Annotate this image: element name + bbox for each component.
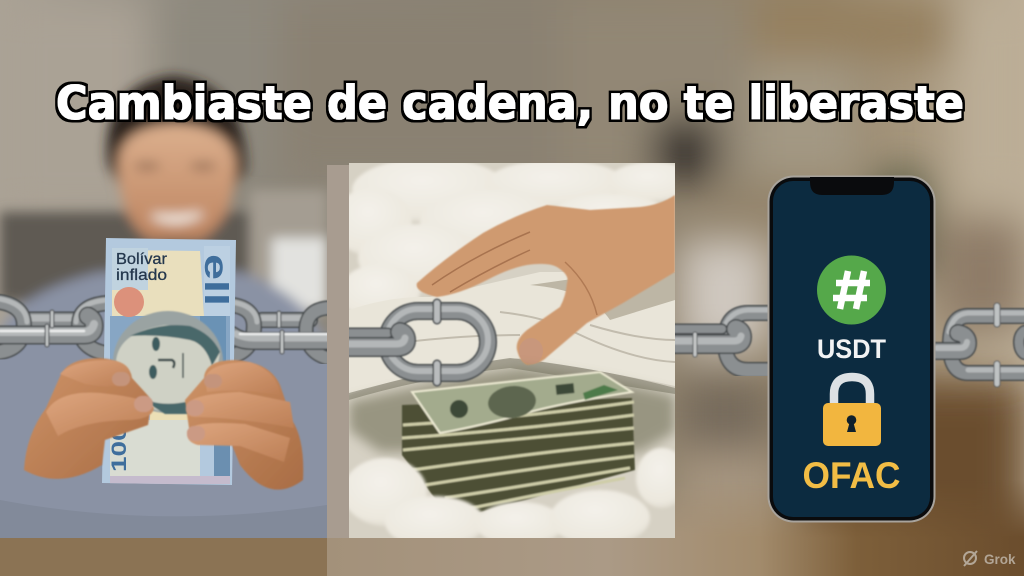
stack of dollar bills	[402, 372, 635, 515]
panel: man holding inflated bolivar note	[0, 76, 327, 538]
hands holding note	[24, 358, 303, 490]
quilted mattress top	[349, 163, 675, 310]
USDT badge	[817, 256, 886, 324]
lifted mattress edge	[349, 272, 675, 395]
note seal	[114, 287, 144, 317]
note rotated value: 1000	[108, 410, 131, 472]
lower floor tones	[0, 530, 327, 576]
padlock icon	[823, 377, 881, 446]
phone notch	[810, 177, 894, 195]
chain link over mattress	[349, 303, 488, 382]
chain: right of phone	[935, 306, 1024, 384]
note rotated denomination: ell	[198, 254, 235, 306]
banknote: Bolívar inflado: inflado	[116, 267, 167, 284]
chain: left of note	[0, 299, 110, 354]
watermark: Grok	[964, 551, 1016, 567]
phone	[768, 176, 936, 522]
shirt base	[0, 345, 327, 538]
OFAC label: OFAC	[802, 455, 900, 496]
under-mattress shadow	[349, 368, 675, 452]
phone screen	[773, 181, 930, 517]
USDT label: USDT	[817, 334, 886, 364]
quilted mattress bottom	[349, 446, 675, 538]
watermark: Grok: Grok	[984, 552, 1016, 567]
note portrait	[113, 311, 223, 414]
title: Cambiaste de cadena, no te liberaste	[56, 76, 964, 130]
blurred man and room	[0, 68, 327, 345]
banknote: Bolívar inflado	[102, 238, 236, 485]
note label: Bolívar	[116, 251, 168, 268]
chain: left of phone	[670, 310, 772, 370]
panel: hand hiding dollars under mattress	[349, 163, 675, 538]
chain: right of note	[232, 302, 327, 358]
hand	[417, 195, 675, 365]
